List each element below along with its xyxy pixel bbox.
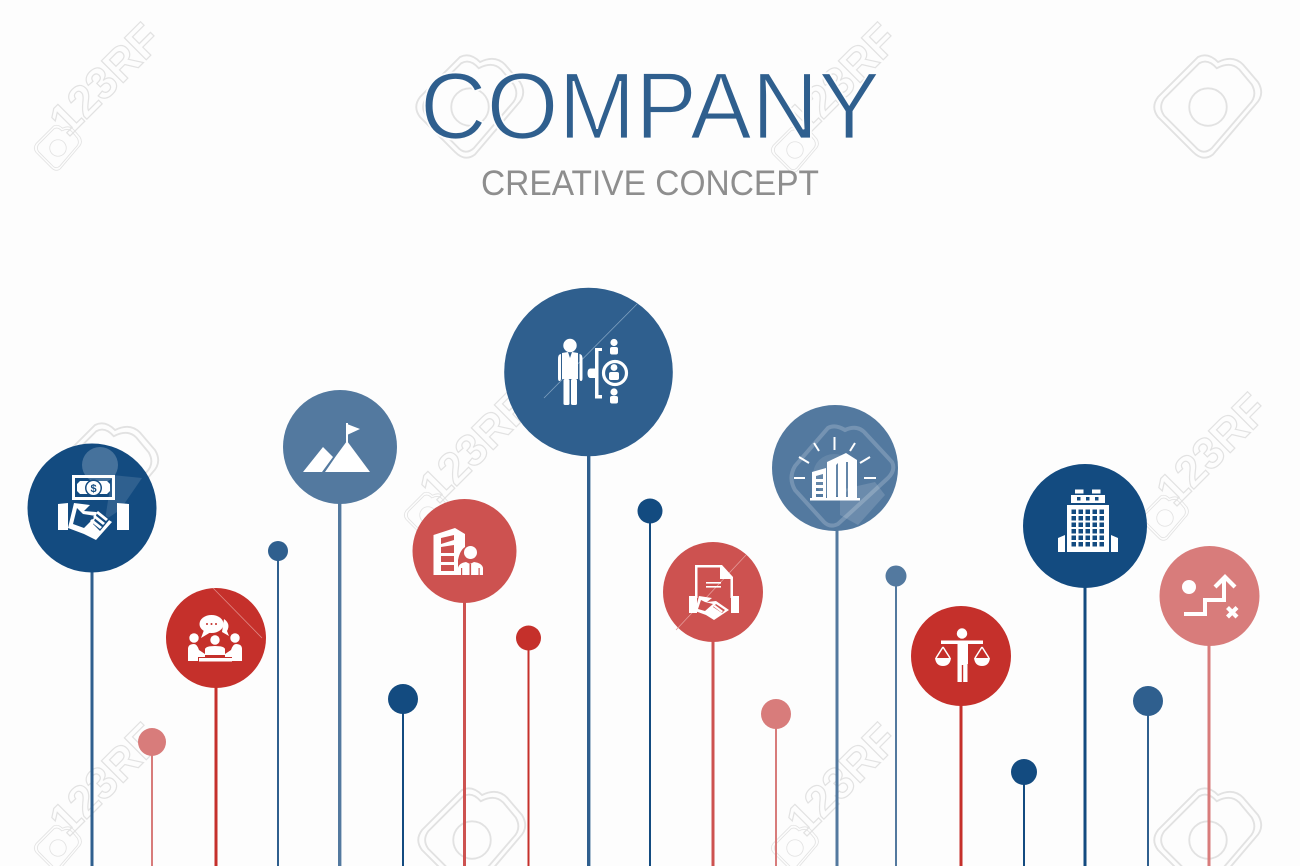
pin 9: office tower [1023, 464, 1147, 866]
pin 7: skyline [772, 405, 898, 866]
small dot pin 8 [1011, 759, 1037, 866]
subtitle: CREATIVE CONCEPT [481, 164, 819, 203]
icon: people meeting [188, 615, 242, 662]
pin 5: central recruitment [504, 288, 673, 866]
pin 3: mountain [283, 390, 397, 866]
small dot pin 5 [638, 498, 662, 866]
small dot pin 3 [388, 684, 418, 866]
pin 1: handshake and money [28, 444, 156, 866]
icon: office tower [1058, 490, 1118, 552]
small dot pin 1 [138, 728, 166, 866]
icon: businessman holding scales [935, 628, 990, 682]
watermarks: 123RF [776, 13, 908, 145]
icon: sunrise city building [794, 437, 876, 500]
icon: stairs with arrow and cross [1182, 577, 1237, 617]
watermarks: 123RF [776, 713, 908, 845]
pin 10: stairs strategy [1160, 546, 1260, 866]
icon: contract and handshake [689, 565, 739, 620]
pin 8: justice scales [911, 606, 1011, 866]
small dot pin 4 [516, 626, 541, 866]
icon: mountain with flag [303, 423, 370, 472]
pin 2: meeting [166, 588, 266, 866]
icon: handshake and banknote [58, 475, 129, 540]
icon: building and businessman [434, 528, 483, 575]
small dot pin 6 [761, 699, 791, 866]
watermarks: 123RF [39, 13, 171, 145]
icon: handshake and banknote: $ [90, 483, 97, 495]
watermarks: 123RF [39, 713, 171, 845]
title: COMPANY [420, 54, 880, 160]
watermarks: 123RF [1146, 383, 1278, 515]
pin 6: contract handshake [663, 542, 763, 866]
icon: manager and candidates [558, 339, 626, 405]
small dot pin 9 [1133, 686, 1163, 866]
watermarks: 123RF [409, 380, 541, 512]
pin 4: building and person [412, 499, 516, 866]
small dot pin 7 [886, 566, 906, 866]
small dot pin 2 [268, 541, 288, 866]
